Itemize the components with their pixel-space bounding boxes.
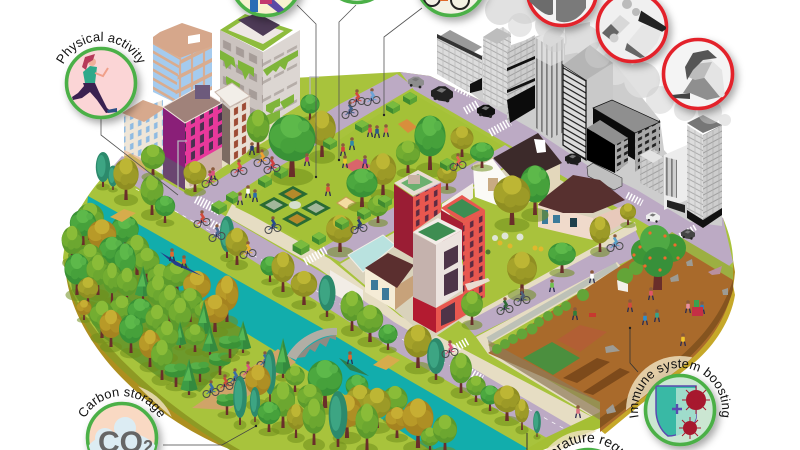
smoke behind the towers xyxy=(485,0,660,98)
road: centre dashes and zebra crossings xyxy=(120,87,696,432)
river xyxy=(85,196,530,450)
forest south of the bridge xyxy=(217,350,457,450)
trees: front of the plots xyxy=(461,175,636,330)
building: cream corner block xyxy=(122,100,165,175)
plot: house gardens xyxy=(340,158,632,340)
people in the garden xyxy=(573,280,704,346)
picnic blanket xyxy=(344,159,372,174)
city: pavement blocks xyxy=(440,35,722,226)
smoke over the towers xyxy=(508,13,731,126)
badge: temperature regulation, cropped xyxy=(552,434,624,450)
stone bridge xyxy=(287,328,337,360)
city building: dark block front xyxy=(587,120,628,173)
tree: behind houses cone xyxy=(520,165,550,222)
wooden docks xyxy=(110,209,400,370)
badge: immune system boosting xyxy=(629,360,730,450)
connector line: first park benefit xyxy=(297,5,317,178)
small house xyxy=(365,253,414,310)
building: pink block xyxy=(163,85,222,190)
plot: vegetable garden soil xyxy=(488,232,733,450)
city building: striped skyscraper xyxy=(536,32,564,138)
badge: top middle, cropped xyxy=(322,0,392,2)
city building: black framed tower xyxy=(563,45,613,160)
forest on river bank xyxy=(62,203,292,398)
bench in park xyxy=(398,119,417,133)
kayaks xyxy=(160,248,369,376)
white house xyxy=(473,133,562,210)
forest undergrowth shade xyxy=(68,218,245,392)
badge: lungs xyxy=(528,0,596,26)
red brick building xyxy=(394,170,441,258)
badge: top left, partly cropped xyxy=(232,0,300,16)
island: top grass surface xyxy=(63,72,733,450)
label: carbon storage: Carbon storage xyxy=(79,389,164,418)
lamp posts xyxy=(178,77,319,190)
pale building with red base xyxy=(413,218,469,333)
connector line: temperature regulation xyxy=(526,433,528,450)
sandbox xyxy=(337,197,356,209)
road: pale pavements xyxy=(150,115,637,431)
badge: bicycle, cropped xyxy=(416,0,486,16)
cyclists on forest path xyxy=(203,351,273,398)
fruit tree xyxy=(631,225,686,290)
plot: park lawn xyxy=(235,93,503,248)
flower beds in park xyxy=(259,186,331,227)
traffic: cars and buses xyxy=(408,77,695,240)
city building: striped white block xyxy=(664,145,687,213)
cyclists on the streets xyxy=(194,88,623,358)
island: layered ground sides xyxy=(63,260,735,450)
city building: tall grid tower xyxy=(687,115,722,228)
building: brown brick block xyxy=(215,83,250,165)
city building: office block with dark roof band xyxy=(437,30,482,93)
connector line: third park benefit xyxy=(383,8,422,116)
halos behind bottom badges xyxy=(138,356,692,450)
fence and bushes along garden xyxy=(488,261,643,354)
label: physical activity: Physical activity xyxy=(56,32,145,64)
rocks in the garden xyxy=(605,259,728,414)
tan cycle path in the forest xyxy=(192,349,296,410)
roads: purple street network xyxy=(110,72,733,438)
badge: carbon storage xyxy=(79,389,166,450)
picket fence xyxy=(330,183,473,310)
badge: sitting distressed person xyxy=(664,40,732,108)
building: tan roof blue tower xyxy=(153,23,212,105)
greenhouse xyxy=(348,235,395,272)
badge: physical activity xyxy=(56,32,145,128)
coral brick building xyxy=(441,195,490,308)
label: immune system boosting: Immune system boosting xyxy=(629,360,730,418)
badge: pills and medicine xyxy=(598,0,666,62)
building: green roof tower with vines xyxy=(220,13,300,130)
connector line: physical activity xyxy=(101,119,178,195)
connector line: carbon storage xyxy=(163,425,257,445)
pink bungalow xyxy=(538,175,625,240)
pedestrians in the park and streets xyxy=(211,124,594,418)
city building: dark block back xyxy=(593,100,660,172)
garden: vegetable beds xyxy=(523,325,630,395)
connector line: immune system xyxy=(629,327,638,372)
connector line: second park benefit xyxy=(338,5,356,161)
plot: lawn near houses xyxy=(440,176,610,310)
trees: park xyxy=(246,94,494,257)
city: far tower xyxy=(565,22,590,55)
flower garden by the houses xyxy=(486,232,544,254)
city building: pale tower xyxy=(483,27,511,107)
trees: by the pink block xyxy=(96,144,249,270)
city building: low grey block xyxy=(640,148,663,195)
bushes xyxy=(211,92,454,255)
trees along the riverside road xyxy=(260,252,541,440)
city building: tower with black bands xyxy=(507,35,535,123)
